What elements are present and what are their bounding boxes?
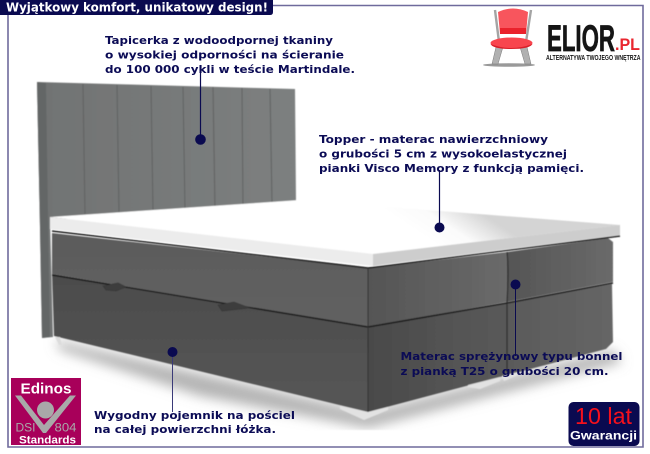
box base: upper section	[52, 233, 613, 327]
box base: lower section	[52, 274, 613, 412]
seams	[52, 231, 620, 412]
callout: storage	[94, 347, 295, 436]
bed feet	[55, 337, 518, 420]
logo: Elior	[483, 8, 640, 67]
badge: Edinos standards: 804	[54, 420, 77, 434]
callout: topper: o grubości 5 cm z wysokoelastycznej	[319, 148, 567, 160]
callout: upholstery: o wysokiej odporności na ścieranie	[105, 48, 344, 62]
topper	[50, 200, 620, 266]
badge: Edinos standards: Standards	[19, 434, 76, 446]
title bar: Wyjątkowy komfort, unikatowy design!	[6, 0, 268, 14]
callout: upholstery: do 100 000 cykli w teście Martindale.	[105, 63, 355, 76]
badge: 10 year warranty: 10 lat	[575, 403, 633, 429]
badge: 10 year warranty	[568, 402, 640, 446]
callout: mattress: Materac sprężynowy typu bonnel	[400, 350, 622, 363]
callout: topper	[319, 133, 584, 232]
callout: upholstery	[105, 34, 355, 145]
icon: red chair	[483, 8, 535, 67]
callout: mattress: z pianką T25 o grubości 20 cm.	[400, 365, 608, 378]
headboard	[37, 82, 296, 338]
callout: upholstery: Tapicerka z wodoodpornej tkaniny	[105, 34, 333, 47]
floor shadow	[55, 340, 622, 428]
callout: storage: Wygodny pojemnik na pościel	[94, 409, 295, 422]
badge: Edinos standards	[11, 378, 81, 446]
callout: storage: na całej powierzchni łóżka.	[94, 423, 276, 436]
badge: Edinos standards: DSI	[16, 420, 36, 434]
illustration: boxspring bed	[37, 82, 622, 428]
callout: topper: Topper - materac nawierzchniowy	[319, 133, 548, 146]
badge: 10 year warranty: Gwarancji	[570, 428, 637, 442]
logo: Elior: .PL	[615, 35, 640, 54]
storage handles	[103, 283, 250, 311]
badge: Edinos standards: Edinos	[20, 380, 72, 398]
callout: mattress	[400, 280, 622, 378]
callout: topper: pianki Visco Memory z funkcją pamięci.	[319, 162, 584, 175]
